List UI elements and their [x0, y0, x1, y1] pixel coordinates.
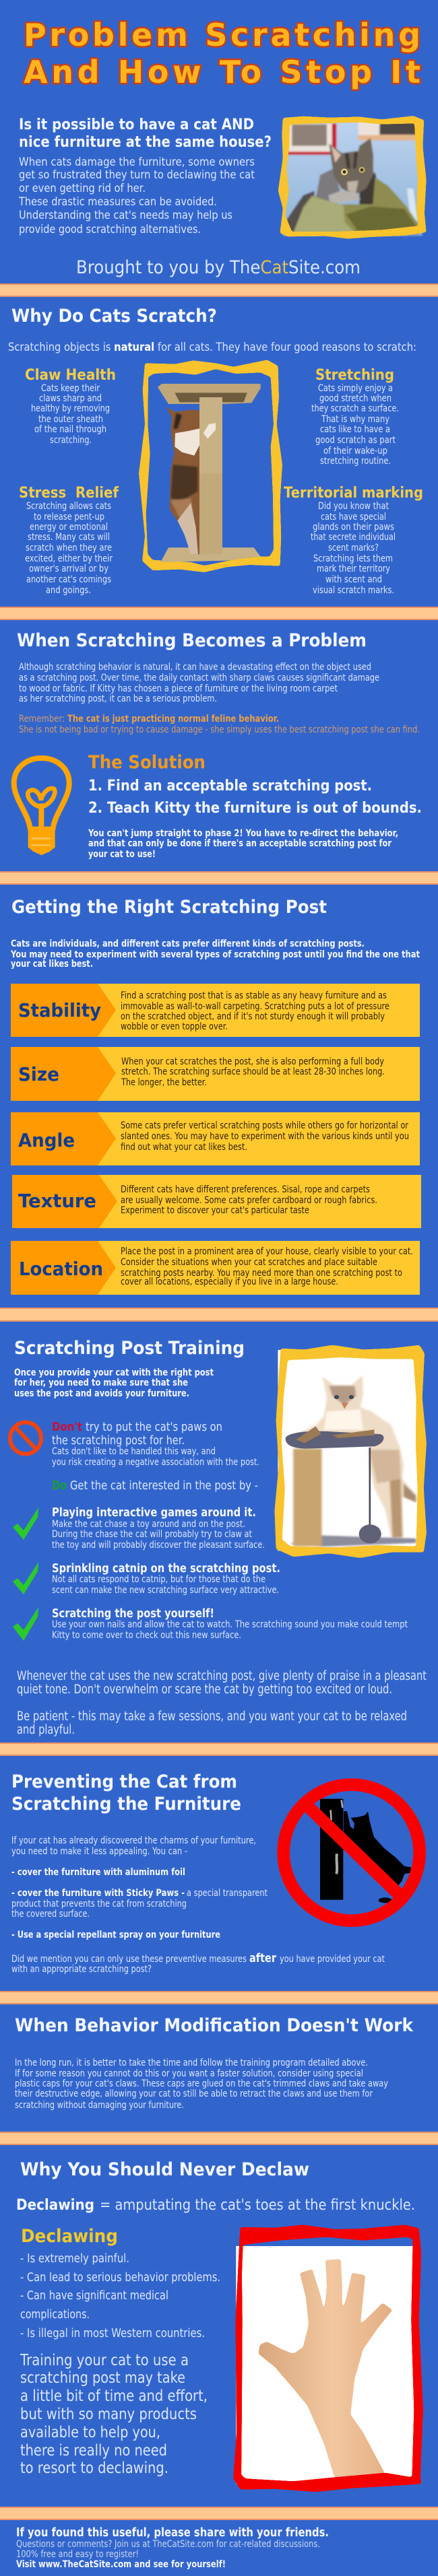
reason: stretching: good scratch as part	[315, 435, 396, 446]
footer	[16, 2526, 329, 2570]
reason: claw health	[25, 367, 116, 446]
footer: Visit www.TheCatSite.com and see for yourself!	[16, 2559, 226, 2570]
prevention text: - cover the furniture with Sticky Paws -	[11, 1888, 185, 1899]
closing message: but with so many products	[20, 2406, 197, 2423]
prevention text: the covered surface.	[11, 1909, 90, 1920]
divider	[0, 283, 438, 297]
closing message: there is really no need	[20, 2442, 167, 2460]
intro text	[10, 939, 420, 970]
reason: stress relief: another cat's comings	[26, 574, 111, 585]
reason: territorial marking: Did you know that	[318, 501, 389, 512]
intro text: Cats are individuals, and different cats prefer different kinds of scratching posts.	[11, 939, 365, 949]
training intro: uses the post and avoids your furniture.	[14, 1388, 189, 1399]
tip: scratching the post yourself: Kitty to come over to check out this new surface.	[52, 1630, 241, 1641]
problem text: to wood or fabric. If Kitty has chosen a piece of furniture or the living room carpet	[19, 683, 338, 694]
reason: territorial marking: visual scratch marks.	[313, 585, 394, 596]
declawing list: complications.	[20, 2308, 90, 2321]
framed photo: kitten on cushion	[278, 116, 427, 239]
row: location: Location	[19, 1258, 103, 1280]
heading: scratching post training: Scratching Post Training	[14, 1338, 245, 1359]
prevention text: If your cat has already discovered the charms of your furniture,	[11, 1835, 256, 1846]
closing message	[20, 2352, 208, 2477]
reason: claw health: claws sharp and	[39, 393, 102, 404]
tip: scratching the post yourself	[52, 1606, 408, 1641]
heading: why do cats scratch: Why Do Cats Scratch?	[11, 306, 217, 327]
reason: territorial marking: glands on their paws	[313, 522, 394, 533]
reason: stretching: of their wake-up	[323, 446, 387, 456]
declawing list: - Can have significant medical	[20, 2289, 168, 2303]
framed photo: cat on scratching post	[139, 360, 282, 572]
heading: preventing the cat: Scratching the Furniture	[11, 1794, 241, 1815]
row: size: stretch. The scratching surface should be at least 28-30 inches long.	[121, 1066, 385, 1077]
icon: check mark 1	[13, 1507, 38, 1540]
don't item: you risk creating a negative association with the post.	[52, 1457, 259, 1468]
row: size: The longer, the better.	[121, 1077, 207, 1088]
reason: stress relief: Stress Relief	[19, 485, 119, 502]
footer: If you found this useful, please share with your friends.	[16, 2526, 329, 2540]
row: size: Size	[18, 1063, 59, 1085]
the solution: 1. Find an acceptable scratching post.	[88, 778, 372, 794]
declawing list: - Can lead to serious behavior problems.	[20, 2271, 220, 2284]
closing message: available to help you,	[20, 2424, 160, 2441]
intro text: These drastic measures can be avoided.	[18, 195, 217, 209]
intro text: When cats damage the furniture, some owners	[19, 156, 255, 169]
prevention text: after	[249, 1951, 276, 1965]
heading: getting the right post: Getting the Right Scratching Post	[11, 897, 327, 918]
row: stability: Stability	[18, 999, 101, 1021]
tip: sprinkling catnip	[52, 1561, 280, 1596]
prevention text: a special transparent	[187, 1888, 268, 1899]
don't item: Don't	[52, 1420, 82, 1434]
reason: territorial marking	[284, 485, 423, 596]
prevention text: you need to make it less appealing. You can -	[11, 1846, 187, 1857]
problem text	[19, 662, 379, 704]
divider	[0, 2132, 438, 2145]
don't item: Cats don't like to be handled this way, and	[52, 1446, 216, 1457]
title: Problem Scratching	[24, 17, 420, 53]
row: texture: Texture	[18, 1190, 96, 1212]
row: location	[11, 1241, 420, 1295]
praise text	[17, 1669, 427, 1737]
panel: when scratching becomes a problem	[14, 630, 422, 860]
row: location: Consider the situations when your cat scratches and place suitable	[121, 1257, 377, 1268]
intro question heading: nice furniture at the same house?	[19, 134, 272, 151]
footer: Questions or comments? Join us at TheCatSite.com for cat-related discussions.	[16, 2539, 320, 2550]
reason: claw health: Cats keep their	[41, 383, 100, 394]
prevention text: with an appropriate scratching post?	[11, 1964, 152, 1975]
panel: getting the right scratching post	[10, 897, 421, 1295]
row: stability: on the scratched object, and if it's not sturdy enough it will probably	[121, 1011, 385, 1022]
declawing definition: Declawing	[16, 2197, 94, 2214]
reason: stretching: cats like to have a	[320, 424, 390, 435]
reason: territorial marking: Scratching lets them	[313, 553, 393, 564]
row: location: cover all locations, especially if you live in a large house.	[121, 1277, 338, 1287]
training intro	[14, 1367, 214, 1399]
prevention text: you have provided your cat	[280, 1954, 385, 1965]
row: texture: Experiment to discover your cat's particular taste	[121, 1205, 309, 1216]
divider	[0, 1308, 438, 1322]
reason: stretching: good stretch when	[319, 393, 392, 404]
icon: no scratching sign	[284, 1785, 420, 1921]
reason: claw health: scratching.	[50, 435, 92, 446]
prevention text: Did we mention you can only use these preventive measures	[11, 1954, 247, 1965]
icon: light bulb	[14, 758, 69, 855]
intro text: Understanding the cat's needs may help us	[19, 209, 232, 222]
reason: territorial marking: that secrete individual	[311, 532, 396, 543]
tip: playing games: Make the cat chase a toy around and on the post.	[52, 1519, 245, 1530]
tip: playing games	[52, 1505, 265, 1551]
reason: stress relief: stress. Many cats will	[28, 532, 110, 543]
reason: stretching	[311, 367, 399, 467]
row: texture: Different cats have different preferences. Sisal, rope and carpets	[121, 1184, 370, 1195]
plastic caps text: In the long run, it is better to take the time and follow the training program detailed above.	[15, 2058, 368, 2068]
title: And How To Stop It	[24, 54, 420, 90]
footer: 100% free and easy to register!	[16, 2549, 139, 2560]
reason: stretching: stretching routine.	[320, 456, 391, 467]
intro question heading	[19, 116, 272, 151]
divider	[0, 1742, 438, 1756]
the solution: your cat to use!	[88, 849, 156, 860]
plastic caps text: If for some reason you cannot do this or you want a faster solution, consider using special	[15, 2068, 363, 2079]
don't item: the scratching post for her.	[52, 1433, 185, 1448]
remember note: Remember:	[19, 714, 65, 724]
training intro: for her, you need to make sure that she	[14, 1378, 188, 1388]
divider	[0, 871, 438, 885]
panel: when behavior modification doesn't work	[15, 2015, 414, 2111]
divider	[0, 1991, 438, 2004]
intro text: or even getting rid of her.	[19, 182, 146, 195]
remember note: The cat is just practicing normal feline behavior.	[67, 714, 279, 724]
reason: claw health: Claw Health	[25, 367, 116, 384]
intro text	[18, 156, 255, 236]
training intro: Once you provide your cat with the right post	[14, 1367, 214, 1378]
reason: stress relief: to release pent-up	[34, 512, 104, 522]
framed photo: hand with cut fingers	[233, 2225, 423, 2492]
intro question heading: Is it possible to have a cat AND	[19, 116, 254, 133]
heading: never declaw: Why You Should Never Declaw	[20, 2159, 309, 2180]
don't item: try to put the cat's paws on	[86, 1420, 222, 1434]
framed photo: cat on cat tree	[274, 1345, 427, 1558]
closing message: a little bit of time and effort,	[20, 2387, 208, 2405]
reason: stress relief: energy or emotional	[30, 522, 108, 533]
title	[24, 17, 420, 90]
row: texture: are usually welcome. Some cats prefer cardboard or rough fabrics.	[121, 1195, 377, 1206]
panel: why do cats scratch	[8, 306, 423, 596]
declawing list: - Is extremely painful.	[20, 2252, 129, 2266]
do item: Get the cat interested in the post by -	[70, 1479, 258, 1493]
problem text: as her scratching post, it can be a serious problem.	[19, 693, 217, 704]
closing message: Training your cat to use a	[20, 2352, 189, 2369]
reason: claw health: the outer sheath	[38, 414, 103, 425]
panel: preventing the cat from scratching the furniture	[11, 1771, 420, 1975]
reason: stretching: Stretching	[315, 367, 394, 384]
reason: stress relief: and goings.	[46, 585, 91, 596]
reason: territorial marking: Territorial marking	[284, 485, 423, 502]
row: stability: wobble or even topple over.	[121, 1021, 228, 1032]
heading: preventing the cat: Preventing the Cat from	[11, 1771, 237, 1792]
declawing list: Declawing	[21, 2226, 118, 2247]
intro text: your cat likes best.	[11, 959, 93, 970]
row: size: When your cat scratches the post, she is also performing a full body	[121, 1056, 384, 1067]
reason: territorial marking: scent marks?	[328, 543, 379, 553]
row: angle	[11, 1112, 420, 1165]
declawing list: - Is illegal in most Western countries.	[20, 2327, 205, 2340]
reason: territorial marking: cats have special	[321, 512, 386, 522]
row: angle: find out what your cat likes best.	[121, 1142, 247, 1153]
reason: territorial marking: with scent and	[325, 574, 382, 585]
brought to you by: Brought to you by TheCatSite.com	[76, 257, 361, 278]
heading: when scratching becomes a problem: When Scratching Becomes a Problem	[17, 630, 367, 651]
panel: intro	[18, 116, 427, 278]
tip: playing games: Playing interactive games around it.	[52, 1505, 256, 1520]
reason: stress relief: owner's arrival or by	[29, 564, 108, 574]
row: texture	[12, 1175, 421, 1228]
don't item	[52, 1420, 259, 1468]
prevention text: - Use a special repellant spray on your furniture	[11, 1930, 220, 1940]
reason: stretching: That is why many	[321, 414, 389, 425]
tip: playing games: the toy and will probably discover the pleasant surface.	[52, 1540, 265, 1551]
reason: claw health: of the nail through	[34, 424, 106, 435]
prevention text: product that prevents the cat from scratching	[11, 1899, 187, 1909]
prevention text: - cover the furniture with aluminum foil	[11, 1867, 185, 1878]
row: stability: Find a scratching post that is as stable as any heavy furniture and as	[121, 990, 387, 1001]
reason: claw health: healthy by removing	[31, 403, 110, 414]
divider	[0, 2507, 438, 2520]
row: size	[11, 1047, 420, 1101]
declawing list	[20, 2226, 220, 2340]
panel: scratching post training	[10, 1338, 427, 1737]
tip: playing games: During the chase the cat will probably try to claw at	[52, 1529, 252, 1540]
reason: stretching: they scratch a surface.	[311, 403, 399, 414]
do item: Do	[52, 1479, 67, 1493]
intro text: get so frustrated they turn to declawing the cat	[19, 168, 255, 182]
heading: when behavior modification: When Behavior Modification Doesn't Work	[15, 2015, 414, 2036]
tip: scratching the post yourself: Scratching the post yourself!	[52, 1606, 214, 1621]
plastic caps text	[15, 2058, 388, 2111]
row: stability	[11, 984, 420, 1037]
plastic caps text: scratching without damaging your furniture.	[15, 2100, 184, 2111]
closing message: to resort to declawing.	[20, 2460, 168, 2477]
closing message: scratching post may take	[20, 2369, 185, 2387]
intro text: provide good scratching alternatives.	[19, 223, 201, 236]
remember note	[19, 714, 420, 735]
reason: stress relief	[19, 485, 119, 596]
icon: check mark 2	[13, 1562, 38, 1594]
praise text: and playful.	[17, 1723, 75, 1737]
icon: prohibition sign	[10, 1422, 41, 1454]
panel: why you should never declaw	[16, 2159, 423, 2492]
the solution: The Solution	[88, 752, 206, 773]
icon: check mark 3	[13, 1607, 38, 1641]
reason: stretching: Cats simply enjoy a	[318, 383, 393, 394]
tip: sprinkling catnip: Not all cats respond to catnip, but for those that do the	[52, 1574, 265, 1585]
reason: territorial marking: mark their territory	[317, 564, 390, 574]
prevention text	[11, 1835, 385, 1975]
divider	[0, 607, 438, 620]
tip: sprinkling catnip: scent can make the new scratching surface very attractive.	[52, 1585, 279, 1596]
tip: sprinkling catnip: Sprinkling catnip on the scratching post.	[52, 1561, 280, 1575]
the solution	[88, 752, 422, 860]
reason: stress relief: scratch when they are	[26, 543, 112, 553]
reason: stress relief: excited, either by their	[25, 553, 113, 564]
row: angle: Angle	[18, 1129, 75, 1151]
reason: stress relief: Scratching allows cats	[26, 501, 111, 512]
heading: preventing the cat	[11, 1771, 241, 1815]
